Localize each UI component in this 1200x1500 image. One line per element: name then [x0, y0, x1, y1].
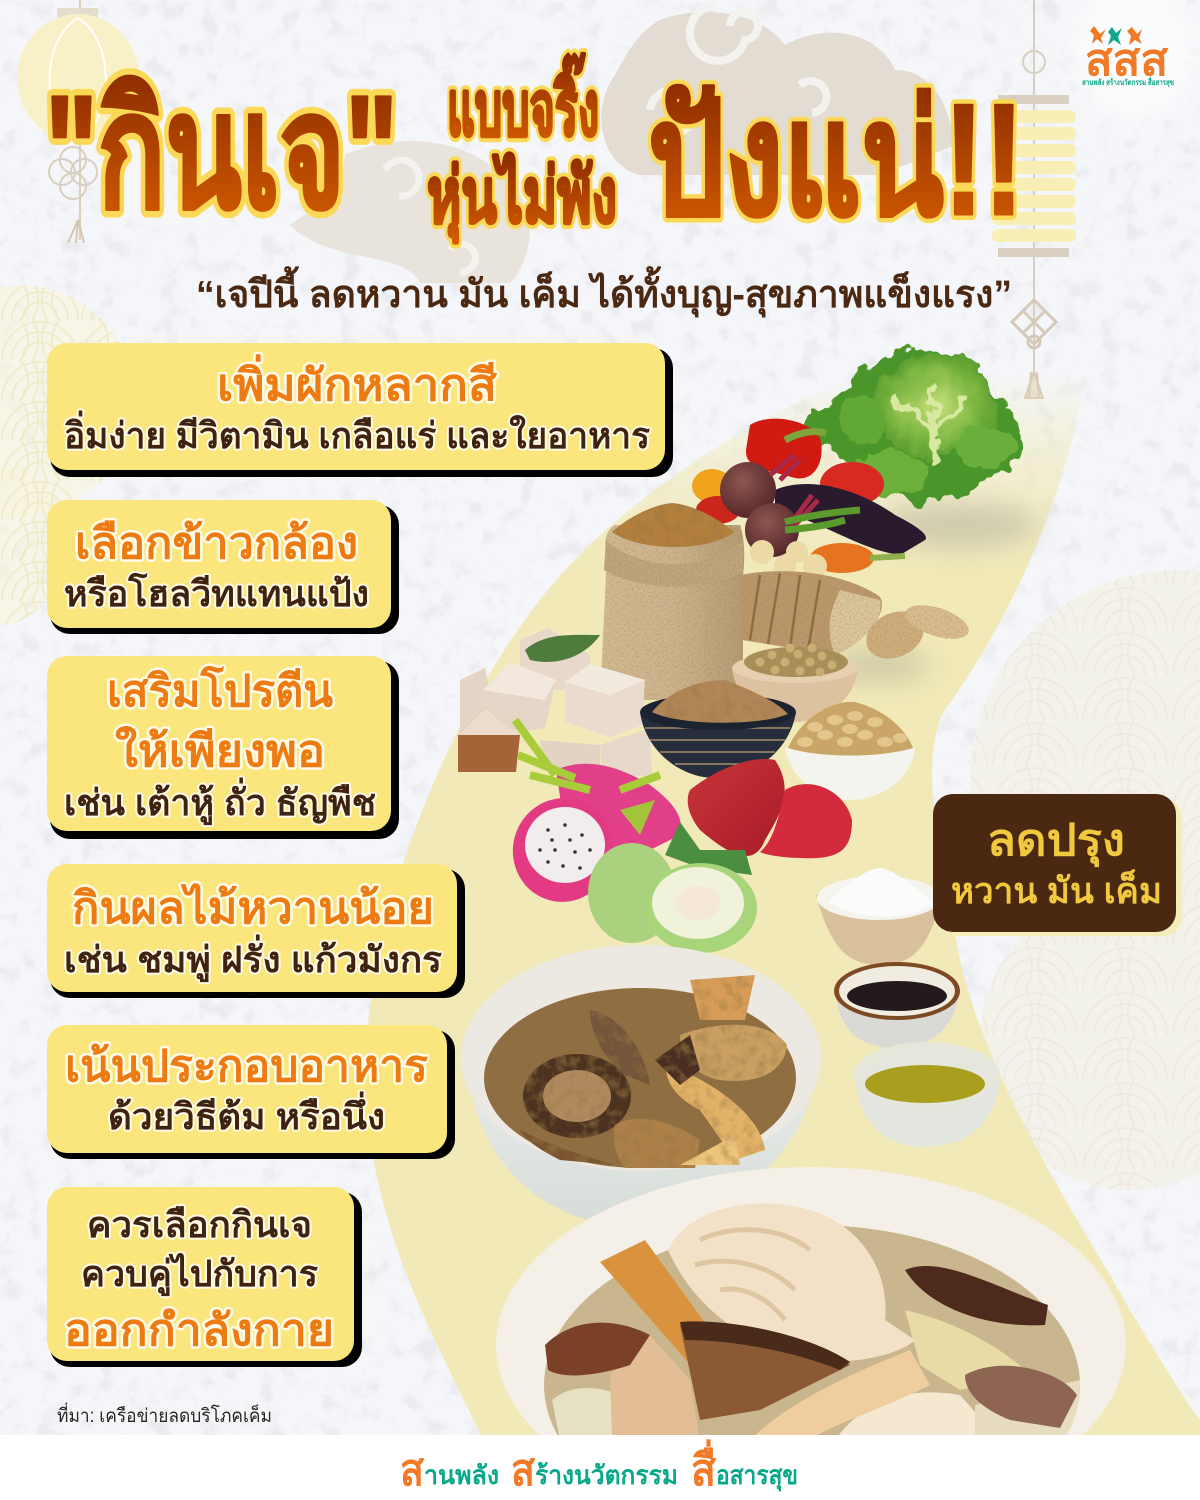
mushroom [523, 1054, 631, 1138]
food: soybean bowl [732, 644, 858, 722]
card: exercise: ออกกำลังกาย [64, 1306, 334, 1355]
food: rose apple right [760, 784, 852, 858]
card: protein [47, 656, 399, 839]
food: guava half [645, 863, 757, 953]
card: colourful vegetables: เพิ่มผักหลากสี [217, 354, 497, 410]
card: protein: เสริมโปรตีน [107, 664, 333, 716]
food: green beans [785, 510, 860, 530]
title: hun mai phang [427, 152, 617, 244]
title: kin je [45, 62, 398, 241]
decoration: clouds [290, 5, 955, 283]
callout: reduce seasoning: หวาน มัน เค็ม [951, 868, 1162, 911]
card: brown rice [47, 500, 399, 634]
decoration: wave pattern right [970, 570, 1200, 1190]
food: rose apple left [688, 759, 785, 856]
title: hun mai phang: หุ่นไม่พัง [427, 152, 617, 244]
food: guava whole [588, 843, 676, 943]
card: brown rice: เลือกข้าวกล้อง [75, 519, 358, 568]
food: tofu cubes [458, 628, 652, 780]
food: soy sauce cup [834, 962, 960, 1048]
food: soft shadows [830, 503, 1040, 681]
card: exercise [47, 1187, 362, 1367]
food: oil cup [854, 1042, 1000, 1147]
title: pang nae: ปังแน่!! [648, 72, 1024, 248]
footer slogan: ร้างนวัตกรรม [535, 1460, 678, 1490]
food: bread slices [859, 598, 973, 668]
food: peanut bowl [785, 702, 915, 800]
decoration: lantern right [992, 0, 1076, 398]
footer slogan: ส [400, 1446, 424, 1495]
callout: reduce seasoning: ลดปรุง [987, 816, 1125, 868]
card: protein: ให้เพียงพอ [115, 725, 325, 776]
decoration: yellow swoosh band [366, 370, 1200, 1435]
footer slogan: อสารสุข [716, 1460, 798, 1492]
card: brown rice: หรือโฮลวีทแทนแป้ง [64, 572, 369, 614]
food: cabbage soup bowl [496, 1167, 1126, 1435]
title: baep jing [447, 53, 599, 152]
card: exercise: ควรเลือกกินเจ [87, 1204, 312, 1245]
footer slogan [400, 1439, 798, 1495]
title: hun mai phang: หุ่นไม่พัง [427, 152, 617, 244]
footer slogan: สื่ [691, 1439, 716, 1495]
food: red pepper [746, 419, 826, 478]
callout: reduce seasoning [933, 794, 1182, 936]
logo [1073, 0, 1197, 120]
decoration: lantern left [17, 0, 139, 243]
title: kin je: "กินเจ" [45, 62, 398, 241]
food: granola bowl [640, 680, 796, 778]
source note: ที่มา: เครือข่ายลดบริโภคเค็ม [57, 1402, 272, 1427]
footer slogan: านพลัง [424, 1460, 499, 1490]
food: sugar bowl [816, 868, 942, 965]
title [45, 53, 1024, 248]
bowl contents [552, 1310, 1080, 1440]
food: yellow tomato [692, 469, 732, 503]
food: eggplant [775, 484, 926, 555]
footer slogan: ส [511, 1446, 535, 1495]
food illustration [458, 350, 1126, 1500]
food: tomato [820, 462, 884, 506]
food: dragon fruit whole [515, 720, 681, 854]
card: exercise: ควบคู่ไปกับการ [81, 1252, 319, 1297]
card: cooking method [47, 1025, 455, 1159]
title: baep jing: แบบจริ๊ง [447, 53, 599, 152]
cabbage [668, 1203, 915, 1361]
card: cooking method: เน้นประกอบอาหาร [65, 1042, 428, 1091]
card: cooking method: ด้วยวิธีต้ม หรือนึ่ง [108, 1091, 385, 1137]
food: beetroots [720, 455, 818, 557]
food: red tomato low [696, 496, 740, 524]
bean curd sticks and mushrooms [545, 1240, 1077, 1440]
card: protein: เช่น เต้าหู้ ถั่ว ธัญพืช [64, 777, 376, 826]
card: low sugar fruit: เช่น ชมพู่ ฝรั่ง แก้วมังกร [64, 934, 443, 983]
title: pang nae: ปังแน่!! [648, 72, 1024, 248]
braised pieces [520, 975, 787, 1168]
food: carrot [810, 543, 905, 573]
broth [540, 1220, 1080, 1450]
logo: สานพลัง สร้างนวัตกรรม สื่อสารสุข [1082, 76, 1174, 88]
title: baep jing: แบบจริ๊ง [447, 53, 599, 152]
footer band [0, 1435, 1200, 1500]
food: guava leaves [665, 822, 752, 875]
subtitle: “เจปีนี้ ลดหวาน มัน เค็ม ได้ทั้งบุญ-สุขภาพแข็งแรง” [196, 266, 1012, 318]
logo: สสส [1085, 36, 1168, 85]
food: rice sack [600, 503, 744, 700]
food: potatoes [750, 540, 827, 578]
decoration: wave pattern left [0, 285, 135, 625]
card: low sugar fruit: กินผลไม้หวานน้อย [72, 882, 434, 933]
card: low sugar fruit [47, 864, 465, 998]
food: bread loaf [741, 571, 882, 655]
logo figures [1090, 26, 1142, 45]
card: colourful vegetables: อิ่มง่าย มีวิตามิน เกลือแร่ และใยอาหาร [64, 410, 651, 456]
food: mushroom soup bowl [461, 945, 821, 1228]
food: dragon fruit half [501, 787, 625, 913]
card: colourful vegetables [47, 343, 673, 477]
food: lettuce [806, 350, 1024, 505]
title: kin je: "กินเจ" [45, 62, 398, 241]
